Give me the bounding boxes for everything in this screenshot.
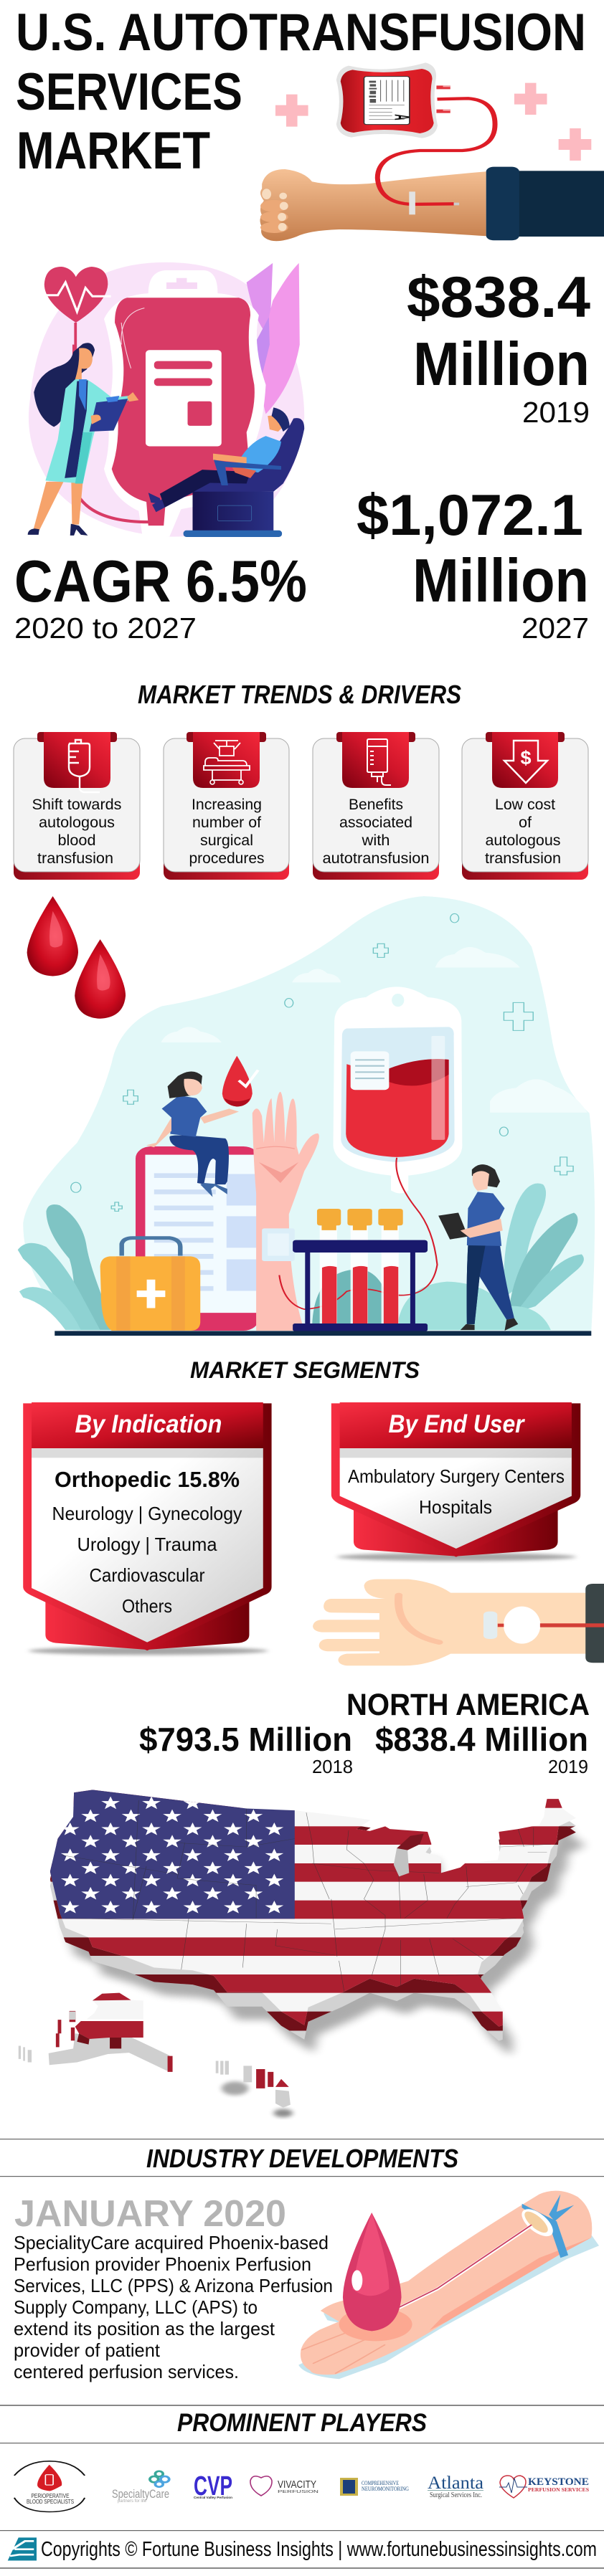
arm	[260, 169, 486, 241]
panel: driver card 4	[462, 732, 588, 880]
map: United States flag map	[19, 1787, 585, 2117]
canton	[39, 1787, 295, 1919]
background blob	[29, 262, 304, 537]
ground line	[55, 1331, 591, 1336]
stat: 2027 market size: 2027	[522, 612, 589, 645]
panel: driver card 3	[313, 732, 439, 880]
fingernails	[262, 189, 288, 231]
logo: Comprehensive Neuromonitoring: NEUROMONITORING	[362, 2485, 409, 2492]
development description: Supply Company, LLC (APS) to	[14, 2296, 258, 2318]
flag surface	[50, 1790, 575, 2027]
logo: Atlanta Surgical Services: Surgical Services Inc.	[430, 2491, 482, 2499]
finger creases	[301, 2331, 385, 2374]
blood drop large	[27, 896, 78, 976]
stat: 2018 value	[139, 1721, 353, 1777]
panel: driver card 4: transfusion	[485, 850, 561, 867]
panel: by indication: Neurology | Gynecology	[52, 1503, 242, 1524]
tube	[74, 345, 148, 522]
background blob	[23, 896, 595, 1331]
development description: SpecialityCare acquired Phoenix-based	[14, 2232, 329, 2253]
panel: by end user: Hospitals	[419, 1496, 492, 1518]
icon: low cost arrow	[504, 741, 547, 783]
icon: surgical table	[204, 741, 250, 780]
stat: CAGR	[14, 548, 307, 645]
heading: market segments: MARKET SEGMENTS	[190, 1357, 420, 1383]
panel: driver card 2	[164, 732, 289, 880]
pink crosses	[275, 83, 591, 161]
stat: 2019 value: 2019	[548, 1756, 588, 1777]
logo: Comprehensive Neuromonitoring: COMPREHENSIVE	[362, 2479, 399, 2486]
icon: IV drip bag	[69, 740, 100, 792]
patient in chair	[148, 407, 304, 537]
panel: by end user	[331, 1402, 580, 1561]
stat: 2027 market size: Million	[412, 547, 589, 615]
title	[16, 4, 586, 180]
heading: market trends and drivers: MARKET TRENDS & DRIVERS	[138, 680, 461, 709]
development description: provider of patient	[14, 2339, 161, 2361]
heart icon with pulse	[44, 267, 111, 352]
panel: driver card 2: surgical	[200, 832, 253, 849]
title: MARKET	[16, 122, 210, 180]
handle cross	[166, 278, 197, 289]
stat: 2018 value: 2018	[312, 1756, 353, 1777]
panel: driver card 2: procedures	[189, 850, 264, 867]
panel: driver card 3: associated	[339, 814, 412, 831]
icon: low cost arrow: $	[520, 747, 532, 769]
panel: by indication: Urology | Trauma	[77, 1534, 217, 1555]
panel: driver card 2: Increasing	[192, 797, 262, 813]
blood bag	[336, 62, 450, 138]
shield body	[331, 1403, 580, 1557]
illustration: hand with blood drop	[298, 2191, 599, 2379]
illustration: doctor and patient with blood bag	[28, 262, 304, 537]
first aid case	[100, 1238, 200, 1331]
logo: CVP: CVP	[194, 2471, 232, 2501]
panel: by end user: Ambulatory Surgery Centers	[348, 1465, 565, 1487]
decorative plus signs	[71, 913, 573, 1211]
development description: Services, LLC (PPS) & Arizona Perfusion	[14, 2275, 333, 2296]
tape	[409, 191, 415, 214]
header	[32, 1402, 263, 1448]
shield body	[23, 1403, 272, 1650]
panel: by indication: Others	[122, 1595, 172, 1617]
panel: by indication: Cardiovascular	[89, 1564, 205, 1586]
shadow	[29, 1647, 268, 1655]
nurse seated on tablet	[146, 1072, 239, 1197]
stat: 2019 market size: Million	[413, 331, 590, 399]
bag white outline	[104, 270, 278, 536]
header	[340, 1402, 572, 1448]
doctor	[28, 343, 138, 536]
Hawaii	[216, 2061, 293, 2117]
stat: CAGR: CAGR 6.5%	[14, 548, 307, 614]
heading: industry developments: INDUSTRY DEVELOPMENTS	[146, 2144, 458, 2173]
panel: by indication: By Indication	[75, 1410, 222, 1438]
hill	[397, 1282, 551, 1330]
panel: driver card 4: of	[519, 814, 532, 831]
panel: driver card 4: autologous	[485, 832, 561, 849]
panel: driver card 1: Shift towards	[32, 797, 122, 813]
logo: CVP	[194, 2471, 232, 2501]
blood drop with check	[222, 1056, 258, 1106]
panel: driver card 3: autotransfusion	[323, 850, 429, 867]
leaves	[247, 263, 273, 337]
blood bag	[112, 298, 255, 526]
logo: Atlanta Surgical Services: Atlanta	[428, 2473, 483, 2493]
blood bag	[334, 987, 462, 1193]
logo: Vivacity Perfusion: PERFUSION	[278, 2490, 318, 2494]
logo: Comprehensive Neuromonitoring	[340, 2478, 409, 2496]
stars	[61, 1797, 283, 1914]
development description: extend its position as the largest	[14, 2318, 275, 2339]
stat: 2019 market size: $838.4	[407, 265, 590, 330]
tube	[279, 1158, 437, 1309]
nurse with clipboard	[438, 1164, 518, 1331]
logo: SpecialtyCare	[112, 2471, 169, 2504]
Alaska	[19, 1993, 173, 2072]
stat: 2027 market size: $1,072.1	[357, 483, 583, 548]
panel: by indication: Orthopedic 15.8%	[55, 1467, 240, 1492]
fingers	[260, 200, 288, 233]
left leaves	[18, 1204, 115, 1330]
stat: CAGR: 2020 to 2027	[14, 612, 197, 645]
right leaves	[504, 1184, 584, 1312]
lakes	[394, 1848, 409, 1876]
logo: SpecialtyCare: partners for life	[118, 2499, 147, 2504]
stat: 2019 market size: 2019	[522, 396, 590, 429]
title: SERVICES	[16, 63, 242, 121]
logo: Fortune Business Insights	[8, 2537, 37, 2561]
panel: by indication	[23, 1402, 272, 1655]
panel: driver card 3: Benefits	[349, 797, 403, 813]
icon: arm receiving blood from bag	[260, 62, 604, 241]
development description	[14, 2232, 333, 2382]
stat: 2018 value: $793.5 Million	[139, 1721, 352, 1758]
heading: North America: NORTH AMERICA	[346, 1688, 590, 1722]
map shadow	[60, 1817, 585, 2054]
panel: driver card 4: Low cost	[495, 797, 555, 813]
logo: Vivacity Perfusion: VIVACITY	[278, 2478, 316, 2491]
panel: driver card 1: blood	[57, 832, 96, 849]
tablet document	[136, 1146, 259, 1331]
hand	[253, 1092, 319, 1331]
blood bag: A	[390, 114, 414, 120]
icon: wrist with IV line	[313, 1579, 604, 1665]
panel: driver card 3: with	[361, 832, 390, 849]
state borders	[62, 1800, 551, 1995]
panel: driver card 1: transfusion	[37, 850, 113, 867]
logo: Perioperative Blood Specialists: BLOOD SPECIALISTS	[27, 2498, 74, 2505]
document	[146, 350, 222, 446]
logo: Perioperative Blood Specialists	[14, 2461, 85, 2511]
date heading: JANUARY 2020	[14, 2193, 286, 2235]
panel: by end user: By End User	[389, 1410, 526, 1438]
map side walls	[50, 1821, 575, 2030]
icon: autotransfusion bag	[367, 739, 391, 785]
logo: Keystone Perfusion Services: KEYSTONE	[528, 2476, 589, 2488]
logo: Keystone Perfusion Services: PERFUSION SERVICES	[528, 2486, 589, 2493]
back ribbon	[45, 1601, 249, 1650]
stat: 2019 market size	[407, 265, 590, 429]
cuff	[486, 167, 519, 240]
logo: Perioperative Blood Specialists: PERIOPERATIVE	[32, 2492, 70, 2499]
sleeve	[518, 171, 604, 237]
logo: SpecialtyCare: SpecialtyCare	[112, 2487, 169, 2501]
test tube rack	[293, 1209, 428, 1331]
panel: driver card 2: number of	[192, 814, 261, 831]
logo: Keystone Perfusion Services	[499, 2476, 589, 2498]
shadow	[337, 1553, 576, 1561]
heading: prominent players: PROMINENT PLAYERS	[177, 2409, 427, 2437]
divider lines	[0, 2139, 604, 2569]
blood drop small	[75, 939, 126, 1019]
panel: driver card 1: autologous	[39, 814, 115, 831]
stat: 2027 market size	[357, 483, 589, 645]
bandage	[262, 1228, 295, 1261]
logo: CVP: Central Valley Perfusion	[194, 2496, 232, 2499]
development description: Perfusion provider Phoenix Perfusion	[14, 2253, 311, 2275]
clouds	[161, 947, 588, 1113]
stat: 2019 value: $838.4 Million	[375, 1721, 588, 1758]
stat: 2019 value	[375, 1721, 588, 1777]
development description: centered perfusion services.	[14, 2361, 239, 2382]
tube	[377, 98, 495, 204]
panel: driver card 1	[14, 732, 140, 880]
logo: Vivacity Perfusion	[250, 2476, 318, 2496]
illustration: blood donation scene	[18, 896, 595, 1336]
back ribbon	[354, 1511, 558, 1556]
